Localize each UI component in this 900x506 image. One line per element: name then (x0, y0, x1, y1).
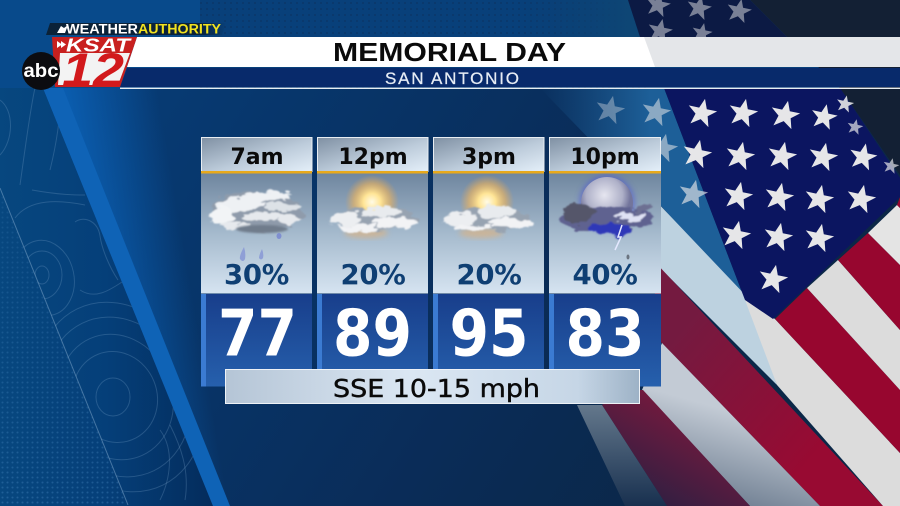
sky panel (549, 174, 661, 294)
temperature block: 89 (333, 298, 412, 372)
time header: 7am (230, 145, 284, 170)
precipitation chance: 20% (457, 259, 521, 291)
logo: Weather Authority strip: AUTHORITY (138, 22, 221, 36)
title: MEMORIAL DAY (333, 37, 566, 67)
icon: partly sunny (443, 175, 533, 238)
time header (549, 138, 661, 174)
panel: left topographic area (0, 0, 200, 506)
title bar white (127, 37, 900, 67)
precipitation chance: 40% (573, 259, 637, 291)
icon: night thunderstorm (560, 175, 653, 260)
temperature block: 83 (566, 298, 644, 372)
logo: KSAT 12: 12 (62, 43, 124, 96)
title bar grey section (644, 37, 900, 67)
temperature block (201, 294, 312, 386)
icon: partly sunny (328, 175, 418, 238)
subtitle bar navy (120, 68, 900, 87)
time header: 12pm (338, 145, 408, 170)
logo: KSAT 12 (52, 36, 137, 96)
temperature block: 77 (218, 298, 297, 372)
icon: rain cloud (209, 191, 302, 261)
time header (201, 138, 312, 174)
panel: American flag (520, 0, 900, 506)
logo: Weather Authority strip (46, 22, 226, 36)
time header (317, 138, 428, 174)
wind bar (226, 370, 640, 404)
logo: abc: abc (24, 61, 59, 82)
time header (433, 138, 544, 174)
temperature block: 95 (450, 298, 528, 372)
logo: KSAT 12: KSAT (66, 36, 133, 56)
flag dark corner (750, 0, 900, 175)
logo: Weather Authority strip: WEATHER (66, 22, 138, 36)
panel: 7am forecast column (201, 138, 312, 386)
flag fold: medium blue (540, 88, 745, 300)
temperature block (433, 294, 544, 386)
sky panel (317, 174, 428, 294)
time header: 3pm (462, 145, 516, 170)
logo: abc (22, 52, 60, 90)
wind bar: SSE 10-15 mph (333, 374, 540, 403)
subtitle: SAN ANTONIO (385, 69, 519, 88)
header bar (120, 37, 900, 89)
flag canton (628, 0, 787, 37)
sky panel (433, 174, 544, 294)
panel: diagonal blue band (43, 88, 230, 506)
panel: 3pm forecast column (433, 138, 544, 386)
thin white rule (120, 88, 900, 89)
precipitation chance: 30% (224, 259, 289, 291)
precipitation chance: 20% (341, 259, 405, 291)
time header: 10pm (570, 145, 640, 170)
flag fold: blue above header (520, 0, 640, 37)
sky panel (201, 174, 312, 294)
flag stars (593, 0, 900, 294)
temperature block (549, 294, 661, 386)
temperature block (317, 294, 428, 386)
panel: 10pm forecast column (549, 138, 661, 386)
flag stripes (577, 197, 900, 506)
panel: 12pm forecast column (317, 138, 428, 386)
flag fold: light blue (640, 200, 777, 385)
